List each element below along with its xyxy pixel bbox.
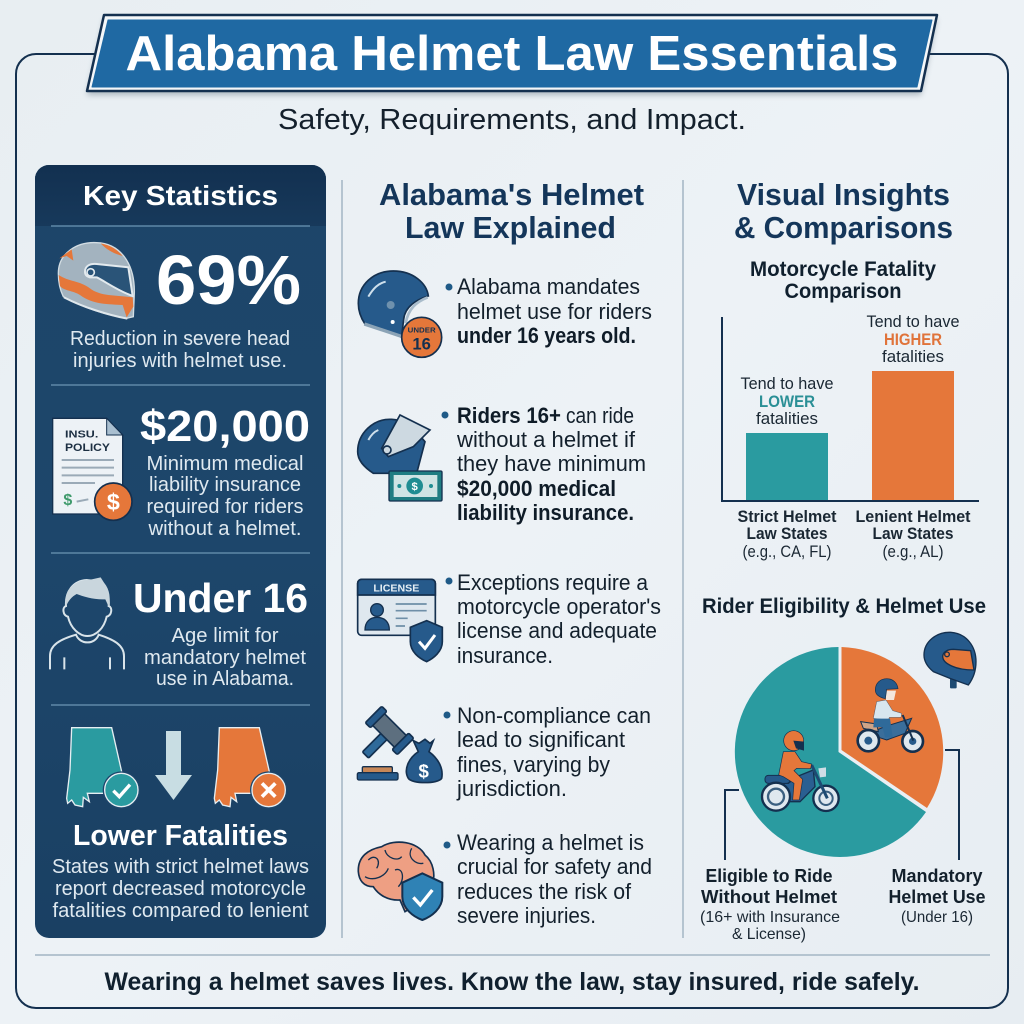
heading: fatality comparison: Comparison [784,280,902,303]
icon: insurance policy: $ [107,489,120,515]
label: eligible to ride: Without Helmet [701,887,837,907]
label: higher: fatalities [882,347,944,366]
label: higher: HIGHER [884,330,942,349]
heading: rider eligibility: Rider Eligibility & Helmet Use [702,595,986,618]
text: age limit: Age limit for [172,625,279,647]
icon: helmet with cash [358,415,442,501]
icon: license [358,579,442,662]
text: riders 16+: they have minimum [457,451,646,476]
stat: lower fatalities: Lower Fatalities [73,820,288,852]
axis label: lenient: Lenient Helmet [856,507,971,526]
label: mandatory use: Mandatory [892,866,982,886]
icon: adult rider [762,731,839,811]
panel: visual insights [700,177,986,943]
axis label: strict: Strict Helmet [738,507,837,526]
icon: helmet [924,632,976,688]
text: mandate: under 16 years old. [457,323,636,348]
axis label: lenient: Law States [872,524,954,543]
heading: law explained: Alabama's Helmet [379,177,644,212]
axis label: strict: Law States [746,524,828,543]
axis label: lenient [856,507,971,561]
label: eligible to ride [700,866,840,943]
text: head injuries [70,328,290,372]
text: mandate: Alabama mandates [457,274,640,299]
text: head injuries: injuries with helmet use. [73,350,287,372]
text: riders 16+: Riders 16+ [457,403,561,428]
heading: law explained: Law Explained [405,210,616,245]
text: minimum insurance: liability insurance [149,474,301,496]
pie chart [725,647,959,860]
stat: $20,000: $20,000 [140,402,310,451]
text: strict laws: report decreased motorcycle [55,878,306,900]
title banner [87,15,937,95]
text: non-compliance [444,703,651,801]
icon: young rider [50,577,124,669]
text: age limit [144,625,306,690]
icon: under 16 helmet: UNDER [408,327,436,334]
label: mandatory use: Helmet Use [888,887,986,907]
text: wearing a helmet: Wearing a helmet is [457,830,644,855]
text: head injuries: Reduction in severe head [70,328,290,350]
icon: strict state [67,728,140,809]
text: exceptions: license and adequate [457,618,657,643]
icon: insurance policy: $ [63,492,72,509]
label: higher: Tend to have [866,312,960,331]
text: minimum insurance [146,453,304,540]
text: exceptions: motorcycle operator's [457,594,661,619]
icon: lenient state [214,728,287,809]
icon: down arrow [155,731,192,800]
text: age limit: use in Alabama. [156,668,294,690]
text: exceptions: insurance. [457,643,553,668]
icon: insurance policy: INSU. [65,429,99,440]
footer message: Wearing a helmet saves lives. Know the law, stay insured, ride safely. [104,968,920,996]
axis label: strict [738,507,837,561]
label: eligible to ride: (16+ with Insurance [700,909,840,926]
text: non-compliance: jurisdiction. [456,776,567,801]
label: eligible to ride: & License) [732,926,806,943]
text: age limit: mandatory helmet [144,647,306,669]
icon: license: LICENSE [373,583,420,594]
text: wearing a helmet: reduces the risk of [457,879,632,904]
text: wearing a helmet [444,830,652,928]
text: minimum insurance: without a helmet. [147,518,302,540]
icon: under 16 helmet [358,271,442,357]
panel: key statistics [35,165,326,938]
icon: racing helmet [58,243,134,319]
stat: under 16: Under 16 [133,575,308,621]
text: riders 16+ [442,403,646,525]
bar: strict states [746,433,828,500]
icon: brain with shield [358,842,442,920]
heading: fatality comparison: Motorcycle Fatality [750,258,936,281]
label: lower: LOWER [759,392,815,411]
icon: gavel and money bag [349,706,442,783]
text: riders 16+: can ride [566,403,634,428]
text: strict laws: States with strict helmet laws [52,856,309,878]
heading: key statistics: Key Statistics [83,180,278,211]
icon: helmet with cash: $ [412,481,419,493]
icon: child rider [858,679,923,752]
label: higher [866,312,960,366]
text: minimum insurance: required for riders [146,496,304,518]
text: mandate [446,274,652,348]
label: mandatory use [888,866,986,926]
bar chart [722,312,979,561]
text: exceptions [446,570,661,668]
axis label: strict: (e.g., CA, FL) [742,542,832,561]
axis label: lenient: (e.g., AL) [882,542,944,561]
text: minimum insurance: Minimum medical [146,453,304,475]
label: lower: fatalities [756,409,818,428]
text: mandate: helmet use for riders [457,299,652,324]
label: lower: Tend to have [740,374,834,393]
icon: insurance policy: POLICY [65,442,111,454]
text: non-compliance: fines, varying by [457,752,610,777]
text: riders 16+: $20,000 medical [457,476,616,501]
heading: visual insights: & Comparisons [734,210,953,245]
heading: visual insights: Visual Insights [737,177,950,212]
text: exceptions: Exceptions require a [457,570,649,595]
text: non-compliance: lead to significant [457,727,625,752]
label: mandatory use: (Under 16) [901,909,973,926]
text: wearing a helmet: crucial for safety and [457,854,652,879]
icon: gavel and money bag: $ [418,760,429,781]
text: strict laws: fatalities compared to lenient [52,900,309,922]
bar: lenient states [872,371,954,500]
text: strict laws [52,856,309,922]
label: eligible to ride: Eligible to Ride [706,866,832,886]
text: riders 16+: without a helmet if [456,427,636,452]
icon: under 16 helmet: 16 [412,334,431,353]
stat: 69%: 69% [156,241,301,319]
text: non-compliance: Non-compliance can [457,703,651,728]
title: Alabama Helmet Law Essentials [126,27,898,81]
label: lower [740,374,834,428]
text: riders 16+: liability insurance. [457,500,634,525]
icon: insurance policy [53,418,132,520]
panel: helmet law explained [349,177,661,928]
text: wearing a helmet: severe injuries. [457,903,596,928]
subtitle: Safety, Requirements, and Impact. [278,104,746,136]
heading: fatality comparison [750,258,936,303]
heading: visual insights [734,177,953,245]
heading: law explained [379,177,644,245]
